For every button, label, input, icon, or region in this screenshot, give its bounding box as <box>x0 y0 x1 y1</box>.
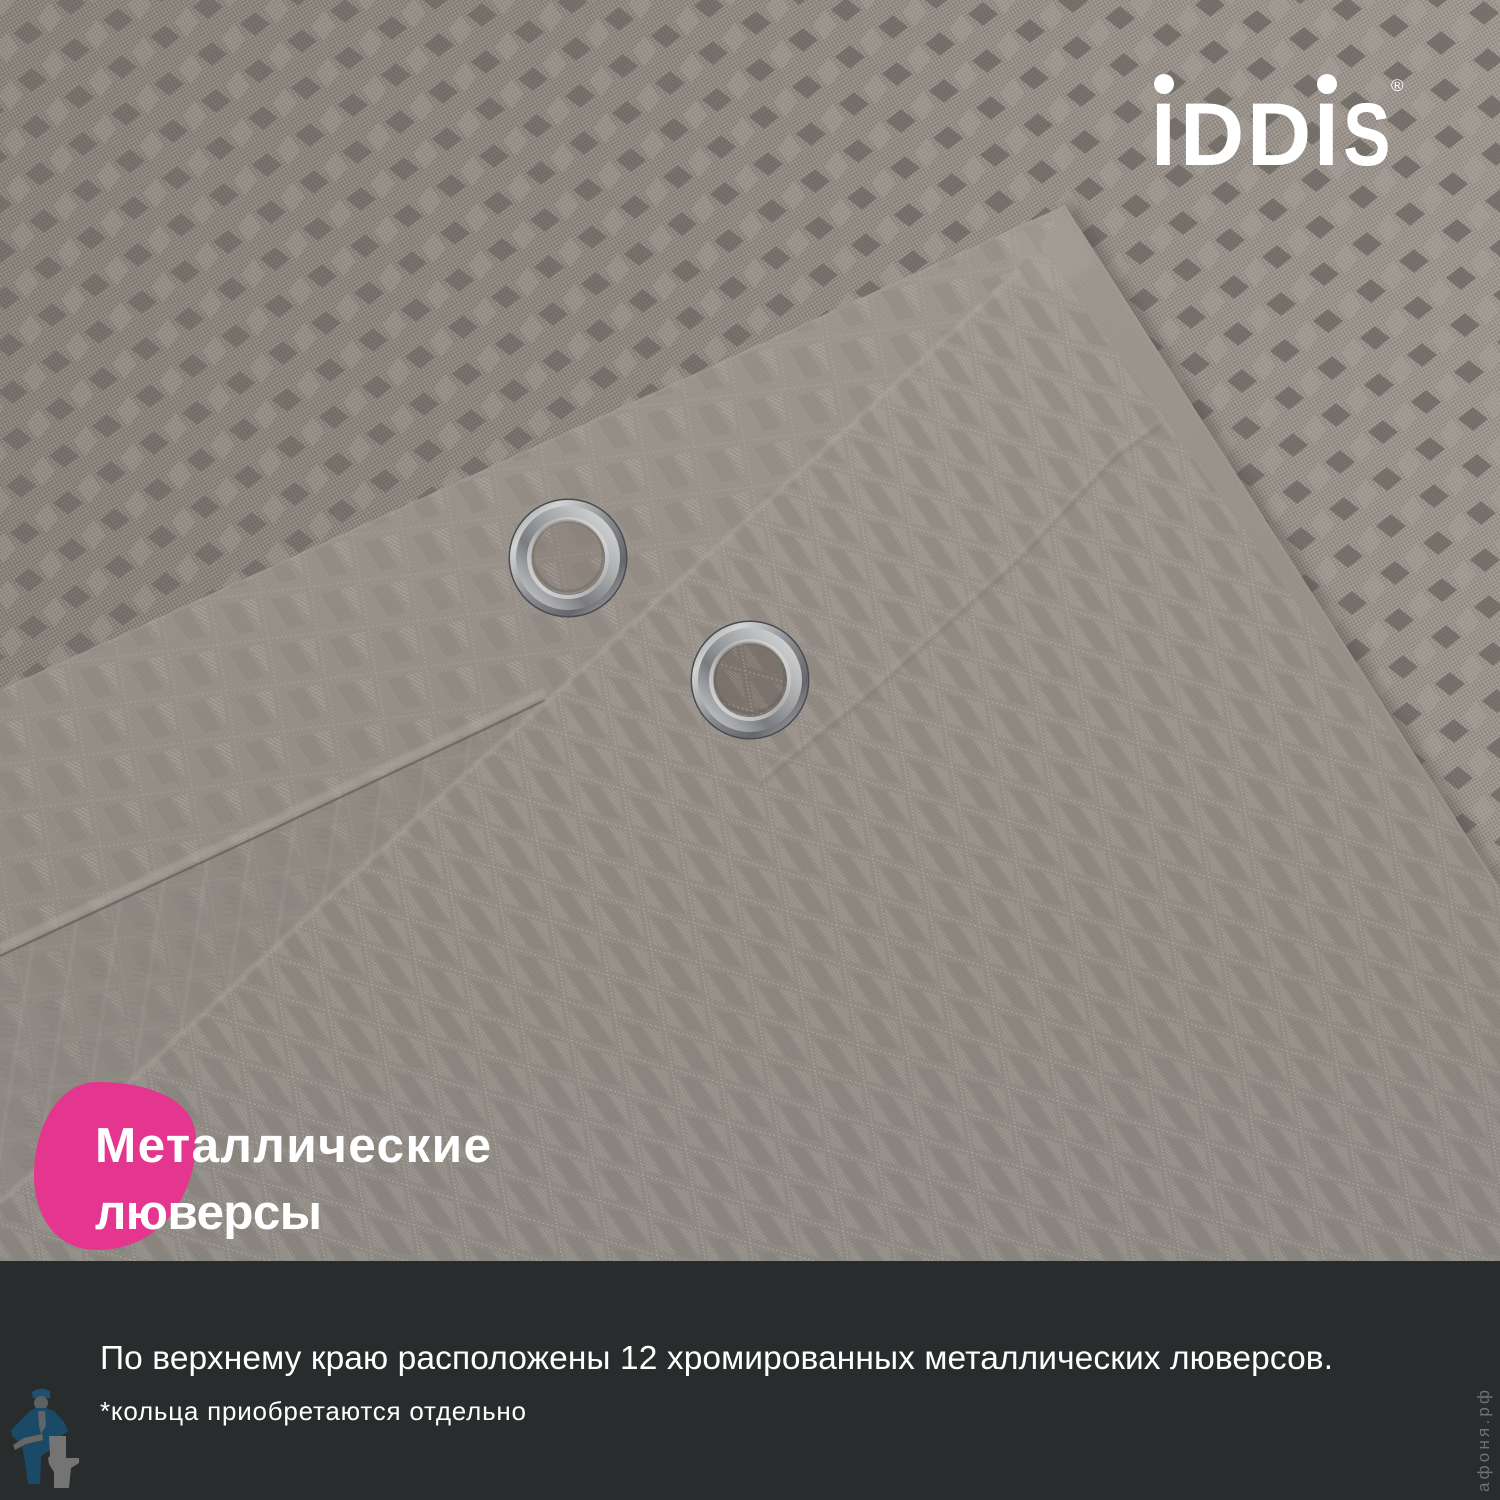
sheen at the fold corner <box>1000 208 1100 300</box>
logo: IDDIS: ® <box>1391 76 1404 95</box>
logo: IDDIS: IDDI <box>1151 84 1339 184</box>
shape: pink blob <box>34 1082 196 1250</box>
text block: footnote: *кольца приобретаются отдельно <box>100 1396 526 1426</box>
seam under the flap <box>0 692 545 956</box>
fabric layer: main panel <box>0 245 1500 1261</box>
watermark: афоня.рф: афоня.рф <box>1474 1390 1493 1492</box>
fold crease right of grommets <box>760 420 1160 785</box>
panel: back fabric <box>0 0 1500 888</box>
panel: dark footer <box>0 1261 1500 1500</box>
icon: grommet left <box>508 498 628 618</box>
fabric layer: strip under seam <box>0 680 570 1203</box>
icon: grommet right <box>690 620 810 740</box>
text block: description: По верхнему краю расположены 12 хромированных металлических люверсов. <box>100 1340 1333 1377</box>
heading: люверсы <box>95 1185 322 1240</box>
panel: folded front fabric <box>0 205 1500 1261</box>
panel edge highlight <box>0 270 1020 1203</box>
heading <box>95 1118 491 1240</box>
logo: IDDIS <box>1151 74 1404 185</box>
logo: IDDIS: S <box>1343 85 1390 185</box>
icon: plumber with toilet <box>11 1389 79 1488</box>
fabric layer: top flap <box>0 205 1065 955</box>
heading: Металлические <box>95 1118 491 1173</box>
